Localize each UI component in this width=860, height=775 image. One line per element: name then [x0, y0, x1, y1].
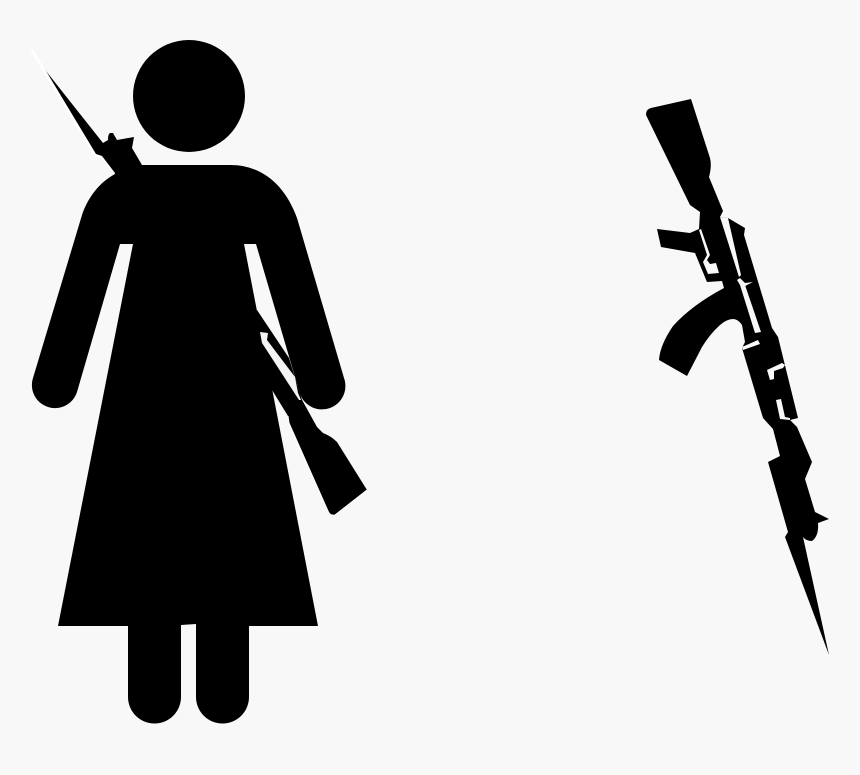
body with dress, arms and legs — [32, 165, 345, 724]
icon: woman with slung rifle — [30, 40, 367, 724]
head — [133, 40, 245, 152]
icon: standalone assault rifle — [646, 99, 829, 655]
slung rifle: bayonet above shoulder — [30, 49, 150, 190]
rifle cut-outs — [699, 217, 790, 420]
slung rifle: barrel and stock below arm — [250, 310, 367, 515]
rifle silhouette — [646, 99, 829, 655]
